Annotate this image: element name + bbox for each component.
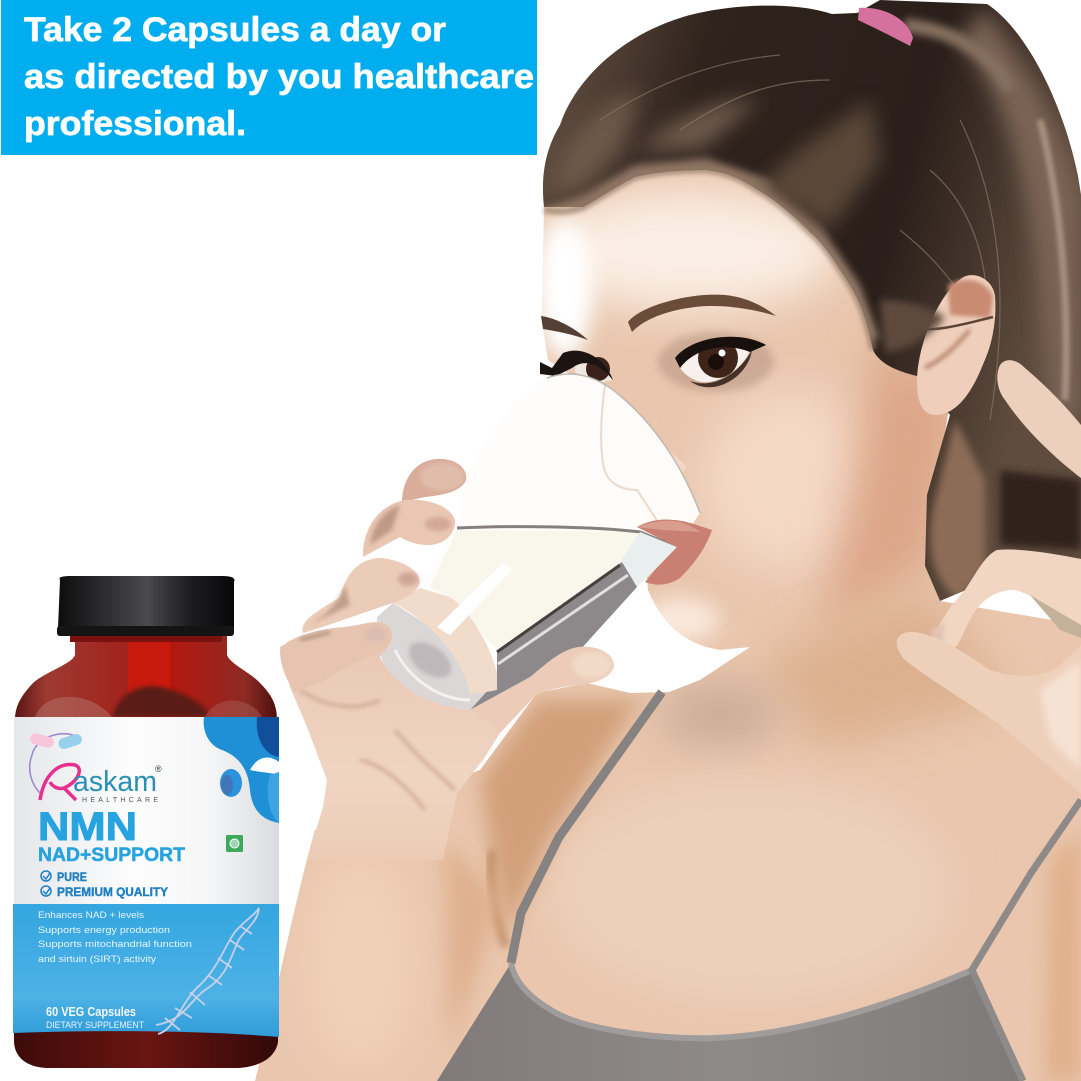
label white area <box>14 717 279 907</box>
base glass <box>377 603 497 710</box>
header text: as directed by you healthcare <box>24 58 534 96</box>
hair band <box>858 8 913 46</box>
label blue area <box>13 904 279 1037</box>
pointing finger <box>997 360 1081 478</box>
nose edge seen through glass <box>601 385 660 525</box>
bottle base <box>14 1030 278 1068</box>
soft hairline edge <box>544 170 873 350</box>
brand logo <box>29 732 162 804</box>
lips <box>637 519 712 585</box>
hair <box>540 0 1081 601</box>
capsule count: 60 VEG Capsules <box>46 1005 136 1019</box>
left strap <box>511 692 662 963</box>
hand making pinch gesture <box>897 550 1081 794</box>
water below line <box>430 530 640 650</box>
product subtitle: NAD+SUPPORT <box>38 845 185 866</box>
quality checks <box>41 870 168 899</box>
glass rim <box>547 374 700 513</box>
header text <box>24 11 534 143</box>
benefits text: Enhances NAD + levels <box>38 910 144 921</box>
drinking hand <box>280 459 614 860</box>
neck highlight <box>128 640 170 695</box>
benefits text: Supports energy production <box>38 925 170 936</box>
clear dark stripe <box>470 562 637 710</box>
brand logo: HEALTHCARE <box>82 797 158 804</box>
top fabric <box>437 963 1023 1081</box>
second finger <box>363 500 455 557</box>
benefits text: and sirtuin (SIRT) activity <box>38 954 156 965</box>
right eye <box>658 332 774 392</box>
third finger <box>302 558 420 633</box>
nose through glass <box>603 395 687 490</box>
highlight <box>437 563 512 635</box>
thumb <box>470 647 614 733</box>
header text: professional. <box>24 105 246 143</box>
palm and wrist <box>280 632 500 860</box>
product bottle <box>13 576 279 1068</box>
brand logo: askam <box>73 766 157 798</box>
supplement label: DIETARY SUPPLEMENT <box>46 1020 144 1031</box>
woman drinking water <box>255 0 1081 1081</box>
quality checks: PREMIUM QUALITY <box>57 885 168 899</box>
blue abstract shapes <box>204 717 279 823</box>
header banner <box>1 0 537 155</box>
pale band <box>393 588 497 695</box>
glass body <box>377 374 700 710</box>
right strap <box>972 800 1081 1081</box>
thumb and palm <box>897 632 1081 794</box>
bottle body <box>15 636 277 1068</box>
trailing hair strand <box>1030 595 1081 638</box>
veg mark <box>226 835 243 852</box>
header text: Take 2 Capsules a day or <box>24 11 446 49</box>
grey tank top <box>437 692 1081 1081</box>
curled finger <box>930 550 1081 649</box>
left eye <box>540 351 613 385</box>
water glass <box>377 374 700 710</box>
index finger <box>402 459 466 502</box>
fourth finger <box>280 622 392 692</box>
brand logo: ® <box>155 764 162 774</box>
neckline trim <box>511 963 972 1038</box>
product name: NMN <box>38 805 137 849</box>
benefits text: Supports mitochandrial function <box>38 939 192 950</box>
quality checks: PURE <box>57 870 87 884</box>
capsule inside <box>112 686 210 717</box>
DNA helix <box>156 908 259 1034</box>
eyebrows <box>541 295 776 340</box>
cap <box>57 576 234 642</box>
skin: face, neck and chest <box>255 150 1081 1081</box>
ear <box>880 275 995 415</box>
benefits text <box>38 910 192 965</box>
